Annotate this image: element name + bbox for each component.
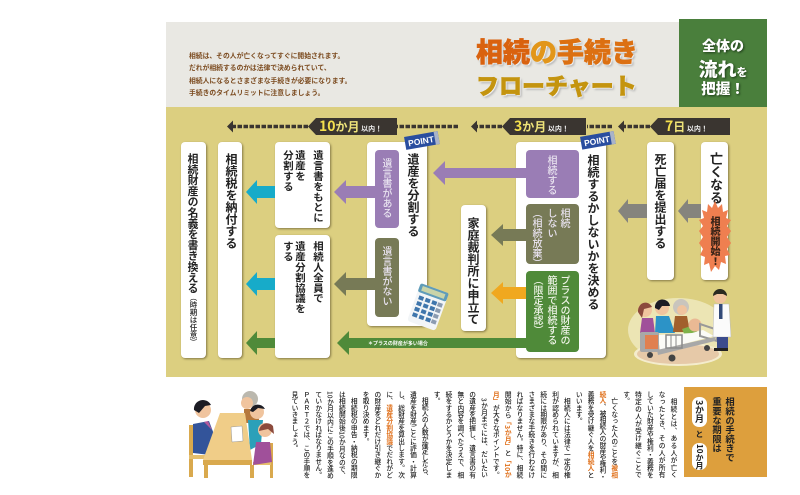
arrow: green to tax xyxy=(246,331,275,355)
step: family court: 家庭裁判所に申立て xyxy=(465,217,482,325)
arrow: renounce to court xyxy=(491,224,526,246)
woman at table xyxy=(270,443,273,478)
body text columns: 亡くなった人のことを 被相 xyxy=(610,398,620,478)
green header badge xyxy=(679,19,767,107)
body text columns: に、 遺産分割協議 でだれがど xyxy=(385,391,395,478)
label: within 10 months: 10か月 以内！ xyxy=(319,116,382,136)
arrow: will to distribution xyxy=(334,180,375,204)
body text columns: 3か月までには、だいたい xyxy=(480,398,490,478)
step: pay tax xyxy=(218,142,242,358)
body text columns: を取り決めます。 xyxy=(361,391,371,445)
step: pay tax: 相続税を納付する xyxy=(223,153,240,249)
title: 相続の手続き xyxy=(476,31,638,70)
body text columns: いいます。 xyxy=(574,391,584,424)
step: divide estate xyxy=(367,142,427,326)
step: divide estate: 遺産を分割する xyxy=(405,153,422,237)
note on green arrow: ＊プラスの財産が多い場合 xyxy=(368,340,428,347)
arrow: death to certificate xyxy=(678,199,701,223)
connector: and: と xyxy=(694,430,705,438)
timeline dashed arrows xyxy=(227,118,730,135)
table xyxy=(203,413,252,460)
elderly woman standing xyxy=(242,391,258,407)
point tag 1: POINT xyxy=(583,134,611,148)
doctor xyxy=(714,290,726,304)
option: limited acceptance: 範囲で相続する xyxy=(545,275,560,345)
intro text: だれが相続するのかは法律で決められていて、 xyxy=(189,62,331,72)
option: limited acceptance: （限定承認） xyxy=(531,275,546,335)
body text columns: 10か月以内にこの手順を進め xyxy=(326,391,336,479)
body text columns: 見ていきましょう。 xyxy=(290,391,300,451)
option: no will: 遺言書がない xyxy=(380,246,395,306)
pill: 3 months xyxy=(692,397,707,427)
body text columns: なったとき、その人が所有 xyxy=(657,391,667,478)
option: will exists: 遺言書がある xyxy=(380,158,395,218)
step: negotiation: 遺産分割協議を xyxy=(293,241,308,314)
man xyxy=(655,301,669,315)
body text columns: ればなりません。特に、相続 xyxy=(515,391,525,478)
woman xyxy=(638,303,652,317)
step: negotiation xyxy=(275,235,330,358)
option: limited acceptance: プラスの財産の xyxy=(558,275,573,345)
intro text xyxy=(189,50,351,97)
arrow: plus assets path xyxy=(337,331,526,355)
point tag 2 xyxy=(404,131,440,150)
callout heading: 相続の手続きで xyxy=(723,397,737,462)
option: inherit: 相続する xyxy=(545,155,560,195)
step: divide by will: 遺言書をもとに xyxy=(311,150,326,223)
option: will exists xyxy=(375,150,399,228)
body text columns: ていかなければなりません。 xyxy=(314,391,324,478)
man behind table xyxy=(250,405,264,419)
body text columns: 利が認められていますが、相 xyxy=(551,391,561,478)
man at table xyxy=(195,402,211,418)
body text columns: 特定の人が受け継ぐことで xyxy=(633,391,643,478)
body text columns xyxy=(290,391,679,479)
illustration: family at bedside xyxy=(628,289,731,366)
option: renounce xyxy=(526,204,579,264)
body text columns: 相続税の申告・納税の期限 xyxy=(349,398,359,478)
callout heading xyxy=(710,397,737,462)
body text columns: していた財産や権利・義務を xyxy=(645,391,655,478)
body text columns: し、総財産を算出します。次 xyxy=(397,391,407,478)
step: decide on inheritance xyxy=(516,142,606,358)
callout: key deadlines xyxy=(684,387,767,477)
green header badge: 把握！ xyxy=(701,78,745,99)
body text columns: は相続開始後10か月なので、 xyxy=(337,391,347,479)
body text columns: 続をするかどうかを決定しま xyxy=(444,391,454,478)
body text columns: 義務を受け継ぐ人を 相続人 と xyxy=(586,391,596,478)
step: family court xyxy=(461,205,486,331)
step: divide by will: 分割する xyxy=(281,150,296,192)
option: renounce: （相続放棄） xyxy=(530,208,545,268)
body text columns: す。 xyxy=(622,391,632,404)
illustration: family meeting xyxy=(189,391,274,478)
point tag 1 xyxy=(580,131,616,150)
title xyxy=(476,31,638,101)
body text columns: 無と内容を調べたうえで、相 xyxy=(456,391,466,478)
step: negotiation: 相続人全員で xyxy=(311,241,326,303)
pill: 3 months: 3か月 xyxy=(693,400,706,424)
green header badge: 全体の xyxy=(702,36,744,56)
title: フローチャート xyxy=(476,67,637,101)
body text columns: さまざまな手続きを行わなけ xyxy=(527,391,537,478)
step: rename assets xyxy=(181,142,206,358)
step: death xyxy=(701,142,728,280)
option: renounce: しない xyxy=(545,208,560,238)
body text columns: 月」 が大きなポイントです。 xyxy=(491,391,501,478)
body text columns: の財産をどれだけ引き継ぐか xyxy=(373,391,383,478)
main flowchart panel xyxy=(166,107,767,377)
label: within 3 months: 3か月 以内！ xyxy=(514,116,569,136)
body text columns: 遺産を財産ごとに評価・計算 xyxy=(408,391,418,478)
step: death certificate: 死亡届を提出する xyxy=(652,153,669,249)
arrow: inherit to divide xyxy=(433,161,526,185)
burst: inheritance begins xyxy=(699,201,731,272)
body text columns: 相続人には法律で一定の権 xyxy=(562,398,572,478)
arrow: certificate to decision xyxy=(618,199,647,223)
step: divide by will xyxy=(275,142,330,228)
step: death certificate xyxy=(647,142,674,280)
arrow: distribution to tax xyxy=(246,180,275,204)
label: within 7 days: 7日 以内！ xyxy=(665,116,708,136)
step: divide by will: 遺産を xyxy=(293,150,308,181)
body text columns: 続人 、被相続人の財産や権利・ xyxy=(598,391,608,479)
body text columns: の遺産を把握し、遺言書の有 xyxy=(468,391,478,478)
arrow: no will to negotiation xyxy=(334,272,375,296)
body text columns: 相続とは、ある人が亡く xyxy=(669,398,679,478)
body text columns: 相続人の人数が確定したら、 xyxy=(420,397,430,479)
option: renounce: 相続 xyxy=(558,208,573,228)
icon: calculator xyxy=(407,283,449,331)
callout heading: 重要な期限は xyxy=(710,397,724,453)
body text columns: ＰＡＲＴ２では、この手順を xyxy=(302,391,312,478)
patient xyxy=(682,325,698,338)
green header badge: 流れを xyxy=(698,55,748,82)
intro text: 相続人になるとさまざまな手続きが必要になります。 xyxy=(189,75,351,85)
pill: 10 months: 10か月 xyxy=(694,444,705,469)
arrow: limited to court xyxy=(491,282,526,304)
intro text: 相続は、その人が亡くなってすぐに開始されます。 xyxy=(189,50,344,60)
pill: 10 months xyxy=(692,443,707,470)
step: rename assets: 相続財産の名義を書き換える （時期は任意） xyxy=(185,153,201,346)
elderly woman xyxy=(673,299,689,315)
burst text: 相続開始！ xyxy=(708,216,723,266)
body text columns: す。 xyxy=(432,391,442,404)
intro text: 手続きのタイムリミットに注意しましょう。 xyxy=(189,87,324,97)
header background xyxy=(166,22,679,107)
step: negotiation: する xyxy=(281,241,296,262)
body text columns: 続には期限があり、その間に xyxy=(539,391,549,478)
body text columns: 開始から 「3か月」 と 「10か xyxy=(503,391,513,478)
option: no will xyxy=(375,238,399,317)
point tag 2: POINT xyxy=(407,134,435,148)
bed xyxy=(658,330,714,350)
option: inherit xyxy=(526,150,579,198)
arrow: negotiation to tax xyxy=(246,272,275,296)
step text: death: 亡くなる xyxy=(707,152,726,204)
step: decide on inheritance: 相続するかしないかを決める xyxy=(585,154,602,310)
option: limited acceptance xyxy=(526,271,579,352)
